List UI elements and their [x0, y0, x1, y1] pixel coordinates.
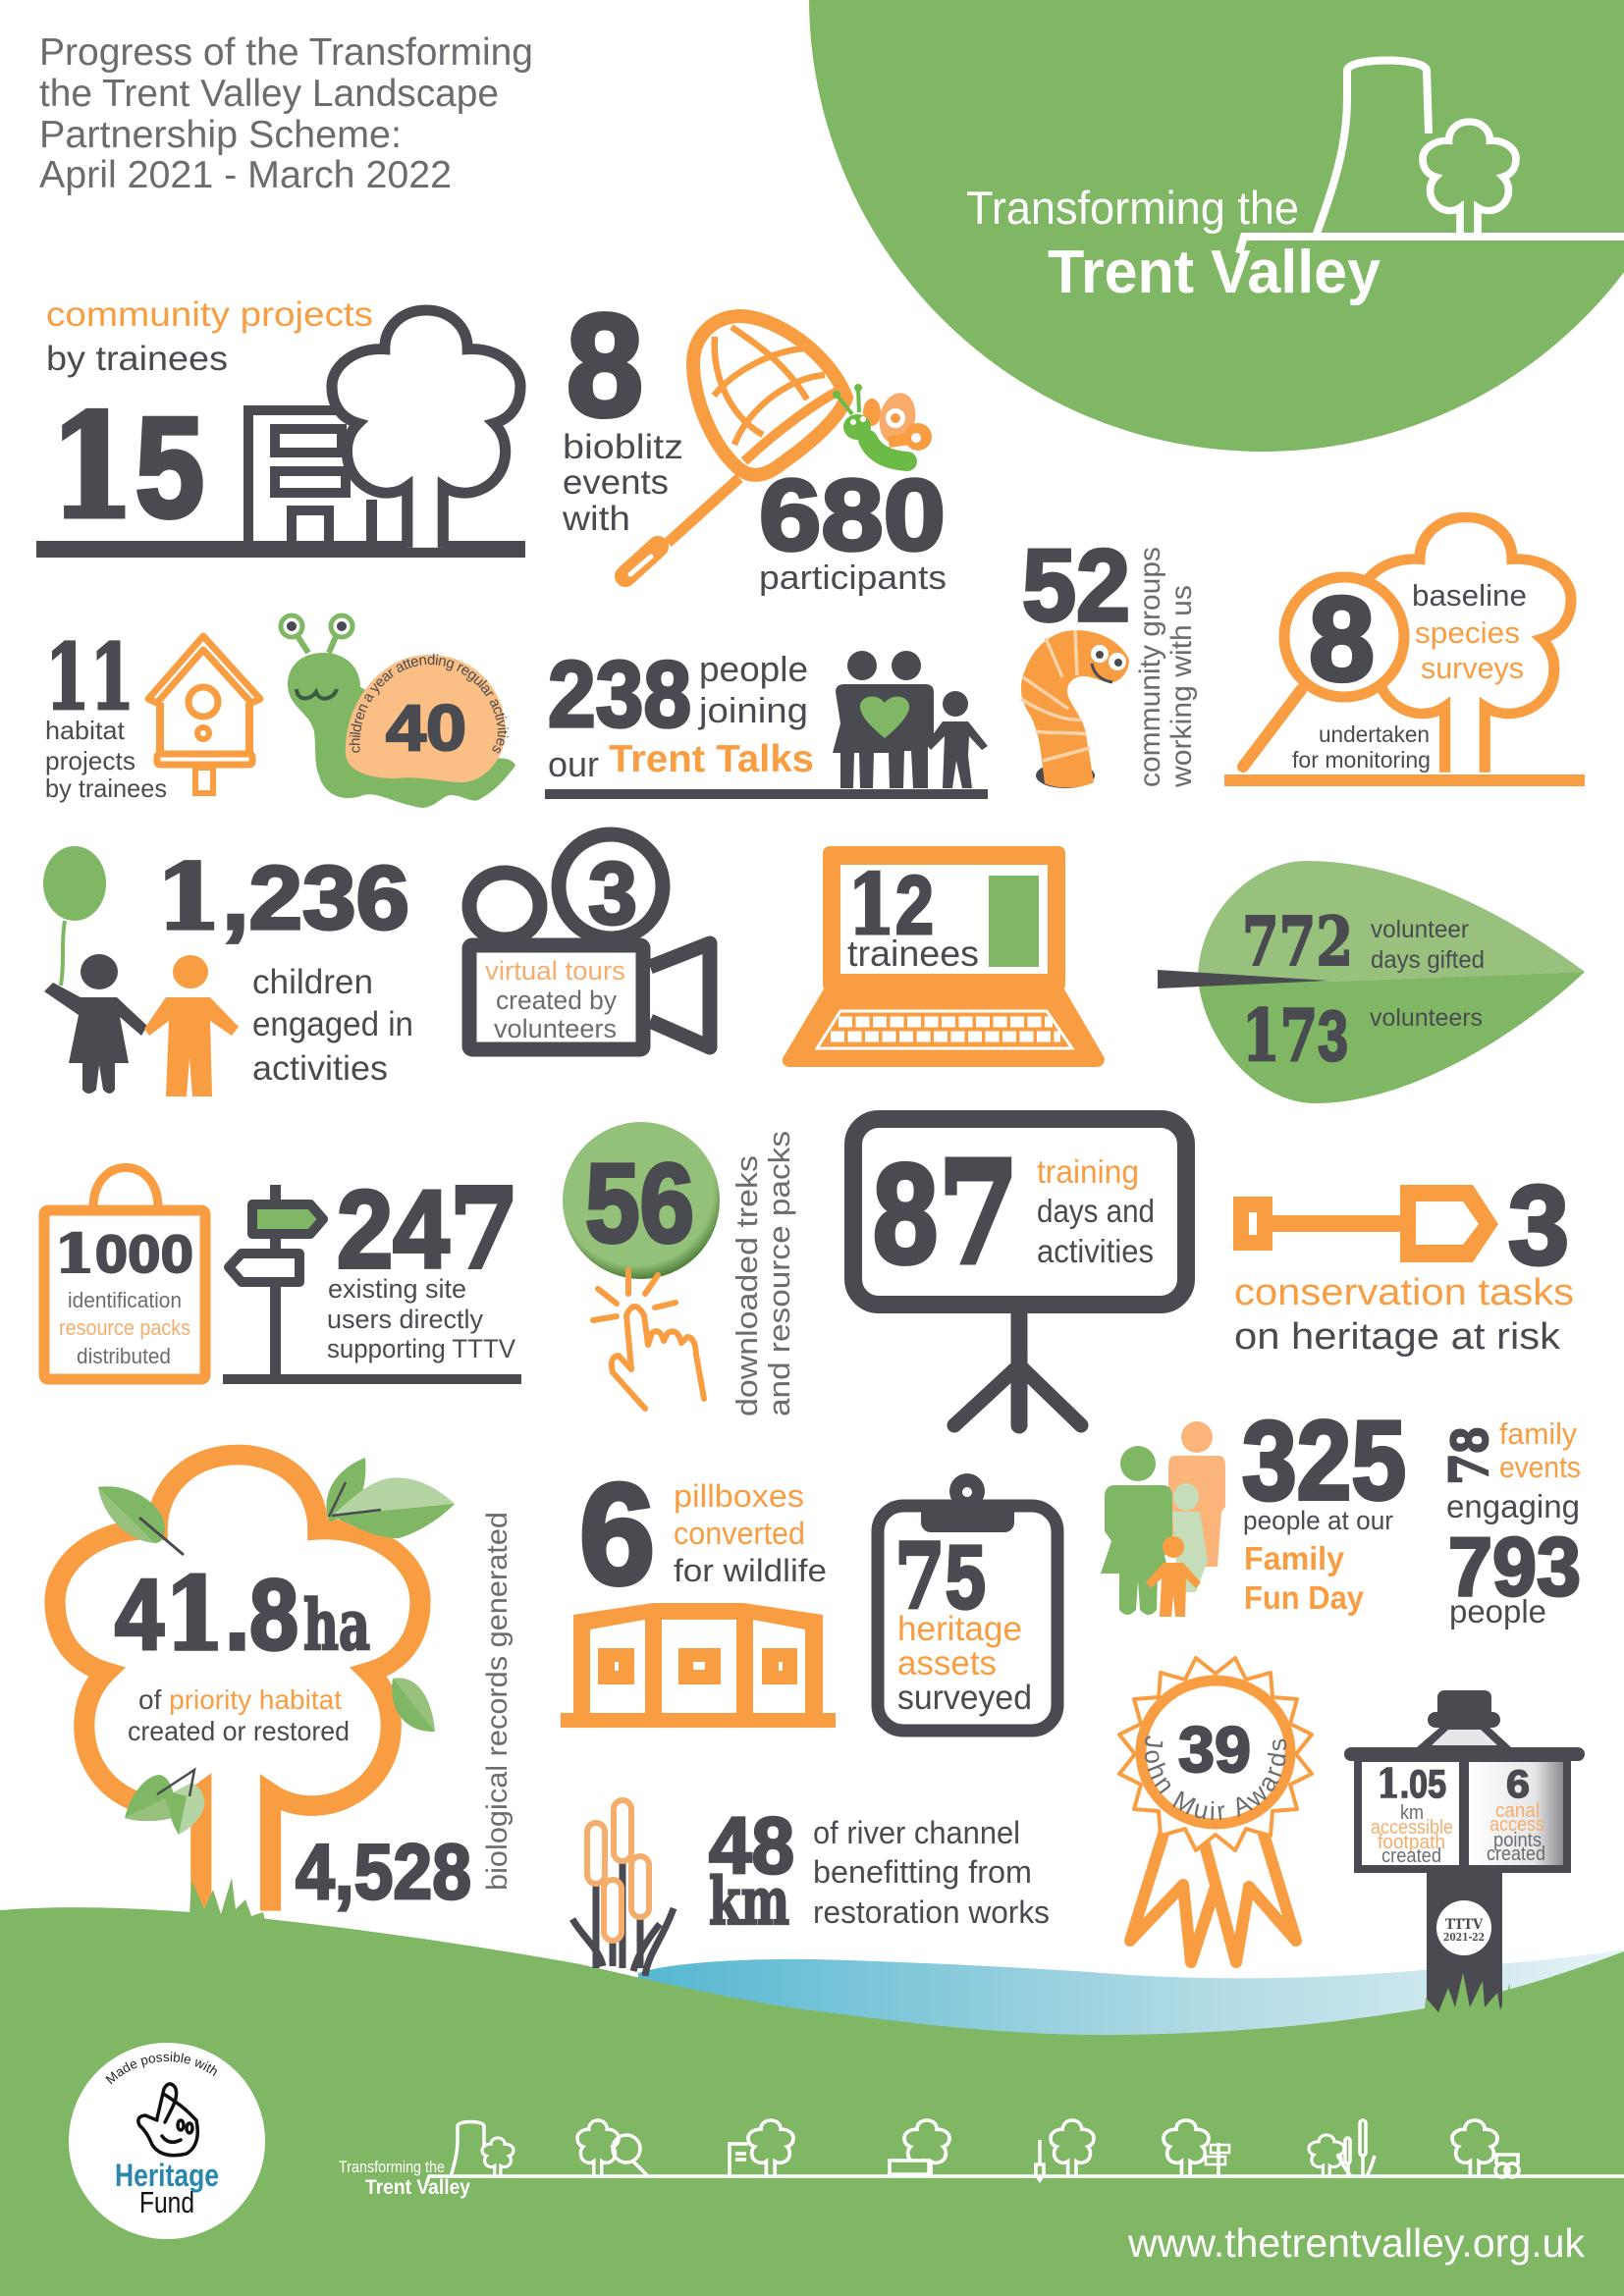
panel: community projects: 15	[49, 384, 204, 551]
panel: river reeds and 48 km	[572, 1800, 1050, 1976]
icon: grass tuft	[187, 1878, 267, 1929]
panel: pillboxes: pillboxes	[674, 1478, 804, 1514]
panel: virtual tours camera: virtual tours	[485, 956, 625, 986]
title: April 2021 - March 2022	[39, 154, 452, 196]
panel: family events: 78	[1437, 1427, 1500, 1485]
Heritage Fund logo	[69, 2043, 265, 2239]
panel: downloaded treks: 56	[585, 1142, 694, 1266]
panel: pillboxes: for wildlife	[674, 1553, 827, 1588]
icon: ribbon tails	[1130, 1831, 1296, 1962]
panel: volunteers leaf: 173	[1242, 993, 1348, 1077]
badge: TTTV 2021-22: 2021-22	[1443, 1931, 1485, 1944]
panel: site users signpost: supporting TTTV	[327, 1334, 515, 1363]
panel: baseline species surveys: baseline	[1412, 578, 1527, 613]
panel: training presentation board: activities	[1037, 1233, 1154, 1269]
panel: habitat projects: habitat	[45, 716, 126, 745]
panel: children engaged: children	[252, 963, 373, 1001]
panel: community groups worm: working with us	[1165, 585, 1198, 788]
icon: butterfly	[833, 384, 932, 461]
Heritage Fund logo: Made possible with	[105, 2052, 217, 2085]
panel: John Muir Awards rosette	[1117, 1655, 1314, 1968]
panel: Trent Talks	[545, 642, 988, 799]
panel: virtual tours camera: 3	[588, 845, 637, 943]
panel: community groups worm	[1021, 529, 1198, 788]
logo: cooling tower and tree	[1239, 61, 1624, 253]
panel: priority habitat tree: created or restored	[128, 1716, 350, 1746]
panel: family fun day: 325	[1242, 1399, 1406, 1523]
river water	[638, 1949, 1624, 2061]
tree and building	[730, 2120, 793, 2175]
panel: heritage assets clipboard: 75	[894, 1523, 986, 1629]
panel: Trent Talks: our	[548, 744, 599, 784]
panel: conservation tasks spade: 3	[1508, 1163, 1569, 1288]
panel: community groups worm: community groups	[1134, 547, 1166, 787]
panel: footpath signboard: 6	[1506, 1763, 1530, 1806]
tree and pillbox	[890, 2120, 949, 2175]
panel: footpath signboard: points	[1493, 1830, 1542, 1851]
panel: family events: 793	[1448, 1521, 1581, 1613]
panel: bioblitz: 8	[567, 285, 643, 447]
panel: family events: events	[1499, 1450, 1581, 1484]
icon: worm	[1021, 630, 1129, 788]
panel: family fun day: people at our	[1243, 1506, 1393, 1535]
panel: downloaded treks: downloaded treks	[730, 1155, 764, 1416]
icon: board on tripod	[853, 1119, 1186, 1425]
panel: community projects	[36, 295, 525, 558]
panel: family events: people	[1449, 1593, 1546, 1629]
panel: Trent Talks: joining	[698, 690, 808, 730]
panel: river reeds and 48 km: benefitting from	[813, 1854, 1032, 1890]
icon: magnifying glass	[1243, 577, 1404, 767]
panel: bioblitz: events	[563, 463, 669, 502]
panel: priority habitat tree: 41.8	[115, 1556, 298, 1674]
tower and tree	[451, 2122, 514, 2176]
panel: Trent Talks: people	[699, 649, 808, 689]
panel: footpath signboard: access	[1489, 1814, 1544, 1836]
panel: trainees laptop: trainees	[847, 934, 979, 974]
icon: large tree outline	[55, 1455, 420, 1911]
panel: habitat projects: projects	[45, 746, 135, 775]
badge: TTTV 2021-22: TTTV	[1445, 1917, 1484, 1933]
panel: site users signpost	[223, 1165, 521, 1384]
icon: laptop	[783, 846, 1105, 1067]
icon: green button	[563, 1122, 720, 1279]
panel: baseline species surveys: species	[1415, 615, 1520, 650]
icon: leaves	[98, 1458, 455, 1835]
icon: grass at post base	[1424, 1973, 1510, 2018]
panel: community projects: by trainees	[46, 340, 228, 378]
panel: footpath signboard: km	[1400, 1802, 1424, 1824]
icon: post and roof	[1344, 1690, 1585, 2016]
panel: resource packs bag: distributed	[77, 1344, 171, 1368]
panel: training presentation board	[853, 1119, 1186, 1425]
icon: family with heart	[833, 651, 988, 788]
panel: footpath signboard: created	[1381, 1845, 1441, 1867]
tree and reeds	[1309, 2120, 1375, 2176]
panel: virtual tours camera: created by	[496, 986, 617, 1015]
panel: volunteers leaf	[1158, 861, 1585, 1103]
website url: www.thetrentvalley.org.uk	[1127, 2220, 1585, 2266]
panel: footpath signboard: accessible	[1371, 1817, 1453, 1839]
panel: heritage assets clipboard	[878, 1473, 1057, 1731]
header green circle with logo	[809, 0, 1624, 452]
icon: family figures	[1101, 1421, 1225, 1617]
panel: baseline species surveys: undertaken	[1319, 721, 1430, 747]
panel: Trent Talks: Trent Talks	[609, 738, 814, 780]
icon: spade	[1233, 1185, 1498, 1262]
tree and binoculars	[1452, 2120, 1519, 2177]
panel: habitat projects	[45, 624, 260, 803]
panel: bioblitz	[562, 285, 947, 597]
panel: pillboxes: 6	[579, 1454, 655, 1614]
panel: conservation tasks spade	[1233, 1163, 1574, 1358]
Heritage Fund logo: Fund	[139, 2185, 194, 2219]
panel: biological records: biological records generated	[481, 1512, 514, 1891]
green ground	[0, 1907, 1624, 2296]
panel: priority habitat tree: ha	[303, 1584, 370, 1666]
panel: biological records	[296, 1512, 514, 1915]
panel: river reeds and 48 km: km	[709, 1863, 789, 1940]
tree and signpost	[1164, 2120, 1229, 2176]
panel: heritage assets clipboard: assets	[897, 1644, 997, 1682]
panel: biological records: 4,528	[296, 1828, 471, 1915]
header green circle with logo: Trent Valley	[1048, 239, 1381, 306]
panel: footpath signboard	[1344, 1690, 1585, 2018]
panel: John Muir Awards rosette: John Muir Awards	[1145, 1735, 1286, 1820]
panel: resource packs bag: 1000	[54, 1222, 193, 1285]
icon: bag	[44, 1168, 205, 1379]
tree and magnifier	[577, 2120, 647, 2175]
panel: community projects: community projects	[46, 295, 373, 334]
title: Partnership Scheme:	[39, 114, 402, 156]
panel: habitat projects: by trainees	[45, 774, 167, 803]
icon: crossed fingers	[138, 2084, 197, 2156]
panel: bioblitz: with	[562, 500, 630, 538]
icon: clipboard	[878, 1473, 1057, 1731]
panel: bioblitz: participants	[759, 560, 947, 597]
panel: volunteers leaf: volunteer	[1371, 916, 1469, 943]
header green circle with logo: Transforming the	[966, 182, 1299, 234]
panel: priority habitat tree	[55, 1455, 455, 1929]
panel: volunteers leaf: volunteers	[1370, 1004, 1483, 1032]
panel: children engaged: engaged in	[252, 1005, 413, 1043]
panel: resource packs bag: identification	[68, 1288, 182, 1312]
panel: volunteers leaf: 772	[1242, 903, 1353, 982]
panel: footpath signboard: created	[1487, 1843, 1545, 1865]
panel: virtual tours camera	[469, 834, 710, 1049]
panel: virtual tours camera: volunteers	[494, 1014, 617, 1043]
panel: bioblitz: bioblitz	[563, 428, 683, 466]
icon: leaf	[1158, 861, 1585, 1103]
panel: family fun day	[1101, 1399, 1406, 1617]
panel: children engaged: 1,236	[155, 844, 409, 950]
panel: pillboxes	[561, 1454, 836, 1728]
panel: river reeds and 48 km: restoration works	[813, 1895, 1050, 1930]
panel: training presentation board: training	[1037, 1153, 1139, 1190]
panel: training presentation board: 87	[873, 1130, 1019, 1296]
footer logo strip with icons	[339, 2120, 1624, 2199]
panel: bioblitz: 680	[759, 458, 946, 571]
title: Progress of the Transforming	[39, 31, 533, 74]
panel: site users signpost: existing site	[328, 1274, 466, 1304]
panel: family fun day: Family	[1244, 1540, 1345, 1576]
panel: family events: family	[1499, 1416, 1577, 1451]
icon: video camera	[469, 834, 710, 1049]
panel: family events	[1437, 1416, 1581, 1629]
panel: baseline species surveys: for monitoring	[1292, 747, 1431, 773]
panel: trainees laptop: 12	[847, 856, 934, 953]
panel: baseline species surveys: 8	[1309, 572, 1375, 706]
icon: butterfly net	[625, 316, 846, 576]
title	[39, 31, 533, 196]
panel: site users signpost: users directly	[327, 1305, 483, 1334]
icon: rosette	[1119, 1658, 1312, 1850]
tree and spade	[1036, 2120, 1094, 2180]
icon: reeds	[572, 1800, 674, 1976]
panel: trainees laptop	[783, 846, 1105, 1067]
icon: snail with 40 children: 40	[386, 691, 466, 764]
icon: bird house	[148, 636, 260, 793]
panel: heritage assets clipboard: heritage	[897, 1610, 1022, 1648]
panel: conservation tasks spade: conservation tasks	[1234, 1272, 1574, 1313]
panel: baseline species surveys	[1224, 517, 1585, 786]
Heritage Fund logo: Heritage	[115, 2158, 219, 2193]
icon: building and tree	[36, 310, 525, 558]
panel: resource packs bag: resource packs	[59, 1315, 190, 1340]
panel: family events: engaging	[1446, 1488, 1580, 1524]
panel: children engaged	[43, 844, 413, 1096]
panel: habitat projects: 11	[45, 624, 135, 730]
title: the Trent Valley Landscape	[39, 73, 499, 115]
panel: river reeds and 48 km: of river channel	[813, 1815, 1020, 1850]
icon: balloon and children	[43, 846, 239, 1096]
panel: resource packs bag	[44, 1168, 205, 1379]
panel: family fun day: Fun Day	[1244, 1579, 1365, 1616]
panel: downloaded treks: and resource packs	[762, 1131, 796, 1416]
panel: footpath signboard: footpath	[1378, 1832, 1445, 1853]
panel: baseline species surveys: surveys	[1421, 651, 1524, 685]
panel: downloaded treks	[563, 1122, 796, 1416]
panel: priority habitat tree: of priority habitat	[138, 1684, 342, 1715]
panel: site users signpost: 247	[337, 1165, 519, 1294]
panel: John Muir Awards rosette: 39	[1178, 1713, 1251, 1786]
badge: TTTV 2021-22	[1436, 1900, 1491, 1955]
icon: snail with 40 children	[279, 613, 515, 808]
icon: signpost	[223, 1185, 521, 1384]
panel: training presentation board: days and	[1037, 1193, 1155, 1229]
panel: volunteers leaf: days gifted	[1371, 946, 1485, 974]
panel: river reeds and 48 km: 48	[709, 1801, 794, 1891]
panel: conservation tasks spade: on heritage at risk	[1234, 1316, 1561, 1358]
panel: Trent Talks: 238	[548, 642, 691, 747]
icon: pillbox building	[561, 1603, 836, 1728]
footer logo strip with icons: Trent Valley	[365, 2176, 470, 2199]
panel: community groups worm: 52	[1022, 529, 1130, 643]
panel: footpath signboard: 1.05	[1377, 1761, 1446, 1807]
panel: pillboxes: converted	[674, 1516, 805, 1551]
panel: children engaged: activities	[252, 1049, 388, 1088]
icon: clicking hand	[593, 1270, 704, 1409]
panel: footpath signboard: canal	[1495, 1800, 1540, 1822]
icon: snail with 40 children: children a year attending regular activities	[350, 654, 509, 754]
footer logo strip with icons: Transforming the	[339, 2158, 445, 2176]
panel: heritage assets clipboard: surveyed	[897, 1679, 1032, 1717]
